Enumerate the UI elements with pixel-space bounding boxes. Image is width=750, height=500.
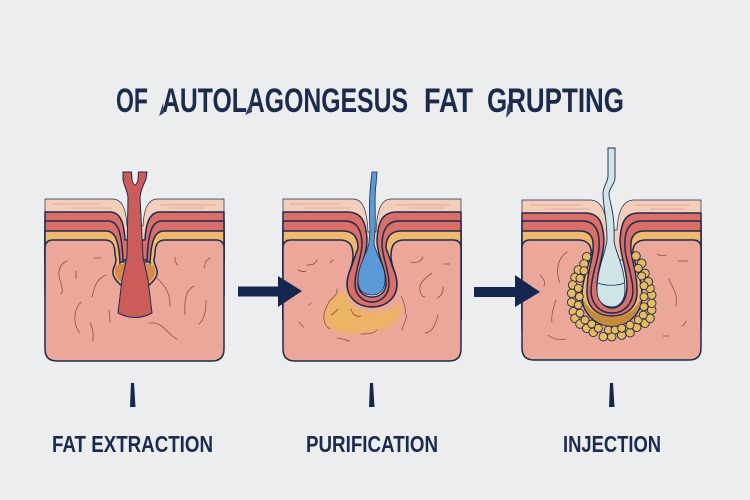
arrow: purification to injection: [474, 275, 540, 307]
epidermis stripes: [530, 205, 690, 209]
skin layer: lower dermis: [283, 221, 461, 320]
orange tissue pockets: [115, 262, 155, 282]
skin layer: yellow fat: [522, 231, 701, 330]
tick: purification: [369, 383, 374, 407]
title: [116, 82, 624, 120]
injection fibres: [540, 252, 688, 340]
pink tissue block: [283, 240, 461, 361]
panel: purification: [283, 172, 461, 361]
tick: fat extraction: [130, 383, 136, 407]
blue cannula and fat bulb: [358, 172, 385, 295]
extraction cannula: [118, 172, 152, 318]
title: OF: [116, 82, 148, 120]
title: AUTOLAGONGESUS: [162, 82, 408, 120]
skin layer: upper dermis: [283, 212, 461, 320]
skin layer: epidermis: [45, 199, 224, 260]
tick: injection: [609, 383, 614, 407]
purification fibres: [298, 257, 450, 341]
injected fat cells: [567, 252, 656, 341]
skin layer: upper dermis: [45, 212, 224, 260]
label: fat extraction: FAT EXTRACTION: [52, 431, 213, 457]
pink tissue block: [45, 240, 224, 361]
skin layer: lower dermis: [522, 221, 701, 320]
tissue fibres: [59, 257, 210, 341]
epidermis stripes: [52, 204, 215, 208]
arrow: extraction to purification: [238, 276, 302, 307]
title: GRUPTING: [487, 82, 624, 120]
skin layer: yellow fat: [45, 231, 224, 295]
skin layer: yellow fat: [283, 231, 461, 320]
epidermis stripes: [290, 204, 450, 208]
pink tissue block: [522, 240, 701, 360]
skin layer: lower dermis: [45, 221, 224, 262]
panel: fat extraction: [45, 172, 224, 361]
skin layer: epidermis: [522, 200, 701, 260]
label: injection: INJECTION: [563, 431, 661, 457]
skin layer: epidermis: [283, 199, 461, 260]
brown fat band: [583, 298, 641, 326]
title: FAT: [424, 82, 473, 120]
purified fat deposit: [324, 292, 402, 333]
skin layer: upper dermis: [522, 213, 701, 320]
label: purification: PURIFICATION: [306, 431, 438, 457]
panel: injection: [522, 148, 701, 360]
injection cannula and bulb: [597, 148, 625, 307]
